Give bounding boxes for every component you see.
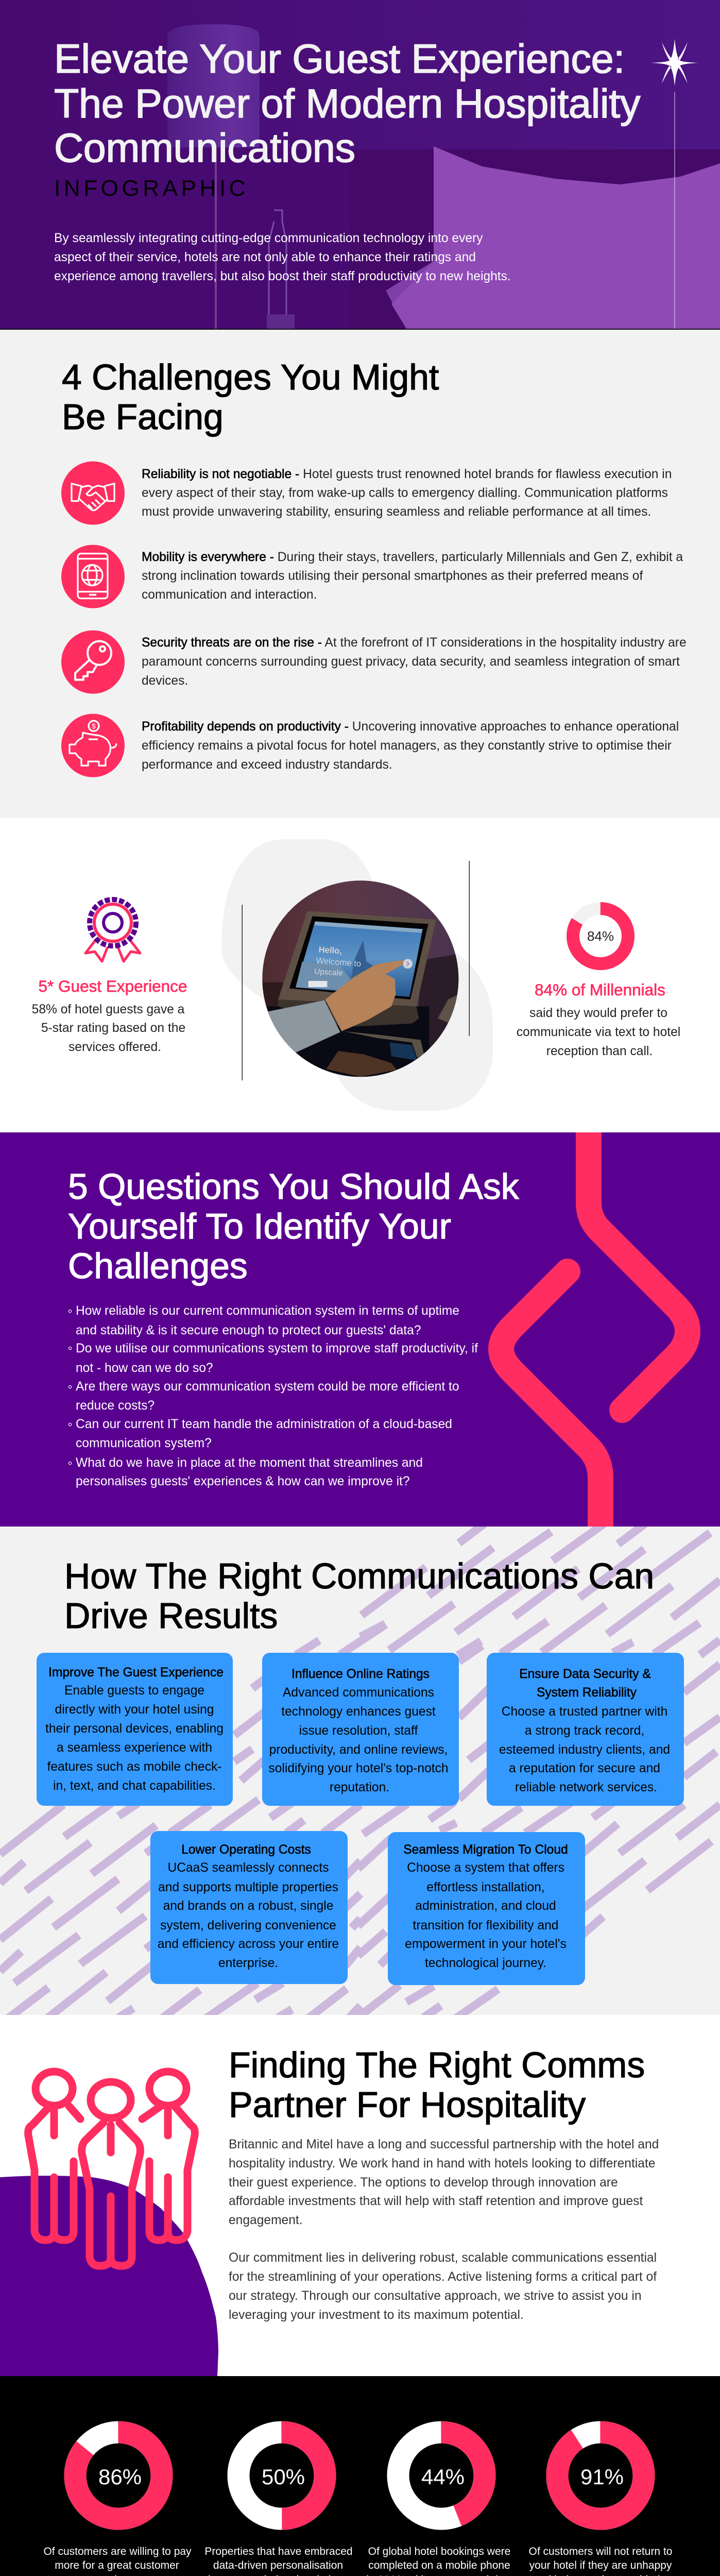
intro text: By seamlessly integrating cutting-edge communication technology into every [54,231,483,245]
card: data security: System Reliability [537,1686,637,1700]
decorative blob top [221,839,379,1010]
stat: 44 percent [366,2432,512,2576]
stat: 50 percent: data-driven personalisation [213,2560,343,2571]
card: seamless migration: Choose a system that offers [407,1861,564,1875]
stat: 86 percent [43,2432,192,2576]
card: seamless migration: technological journey. [425,1956,546,1970]
text: security: Security threats are on the rise - At the forefront of IT considerations in the hospitality industry are [142,636,687,650]
list: questions: Do we utilise our communications system to improve staff productivity, if [76,1342,478,1355]
photo: hand touching tablet: Welcome to [316,956,362,969]
heading: questions: Yourself To Identify Your [68,1206,451,1246]
decorative purple shape [0,2176,218,2376]
list: questions: How reliable is our current communication system in terms of uptime [76,1304,459,1318]
text: 58 percent [32,1003,185,1054]
panel: finding the right partner [0,2015,720,2376]
text: mobility: communication and interaction. [142,588,317,602]
card: data security: a reputation for secure and [509,1761,660,1775]
photo: hand touching tablet: Upscale [314,967,343,978]
text: reliability [142,467,672,519]
heading: results: How The Right Communications Can [64,1556,654,1596]
card: improve the guest experience: in, text, and chat capabilities. [53,1779,216,1793]
heading: comms partner: Partner For Hospitality [229,2084,586,2125]
challenge: mobility [61,545,683,608]
stat: 86 percent: 86% [98,2465,142,2489]
text: mobility [142,550,683,602]
list: questions: communication system? [76,1436,212,1450]
stat: 44 percent: 44% [421,2465,465,2489]
panel: 4 challenges [0,330,720,818]
title: Communications [54,125,355,171]
title: Elevate Your Guest Experience: [54,36,625,81]
card: influence online ratings: Influence Online Ratings [292,1667,430,1681]
list: questions: What do we have in place at the moment that streamlines and [76,1456,423,1470]
stat: 50 percent: 50% [262,2465,305,2489]
decorative blob bottom [337,953,493,1111]
card: seamless migration: transition for flexibility and [413,1919,558,1933]
list: questions: and stability & is it secure enough to protect our guests' data? [76,1324,421,1337]
text: partnership: engagement. [229,2213,303,2227]
heading: challenges: Be Facing [62,397,224,437]
stat: 50 percent [204,2432,353,2576]
list: questions: reduce costs? [76,1399,155,1413]
card: influence online ratings: Advanced communications [283,1686,434,1700]
stat: 44 percent: Of global hotel bookings were [368,2546,510,2557]
list: questions: not - how can we do so? [76,1361,213,1375]
card: data security: Ensure Data Security & [519,1667,651,1681]
icon: sparkle star [651,39,699,86]
text: partnership: their guest experience. The options to develop through innovation are [229,2176,618,2190]
card: seamless migration: effortless installation, [426,1880,545,1894]
heading: 84 percent of millennials: 84% of Millennials [535,980,665,999]
text: 58 percent: 5-star rating based on the [41,1021,185,1035]
hero photo: pillow [386,146,720,329]
card: lower operating costs [150,1831,348,1984]
icon: handshake [61,462,125,524]
heading: comms partner: Finding The Right Comms [229,2045,645,2085]
panel: hero [0,0,720,330]
hero photo: bedside lamp [167,24,260,329]
card: influence online ratings [262,1653,459,1806]
heading: questions: 5 Questions You Should Ask [68,1166,519,1207]
title [54,36,641,171]
list: questions [68,1304,478,1488]
card: improve the guest experience: Enable guests to engage [64,1684,204,1698]
chart: 84 percent donut: 84% [587,928,614,944]
stat: 91 percent: Of customers will not return to [529,2546,672,2557]
icon: piggy bank [61,714,125,777]
card: influence online ratings: issue resolution, staff [299,1724,418,1738]
card: data security: Choose a trusted partner with [502,1705,667,1719]
intro text [54,231,511,283]
text: profitability: efficiency remains a pivotal focus for hotel managers, as they constantly strive to optimise their [142,739,672,753]
list: questions: personalises guests' experiences & how can we improve it? [76,1475,410,1488]
text: 58 percent: 58% of hotel guests gave a [32,1003,185,1016]
stat: 91 percent: 91% [580,2465,624,2489]
heading: questions [68,1166,519,1286]
icon: smartphone globe [61,545,125,608]
heading: results [64,1556,654,1636]
panel: statistics footer [0,2376,720,2576]
heading: comms partner [229,2045,645,2125]
icon: ribbon rosette [85,900,140,961]
text: security: devices. [142,674,188,688]
panel: how communications drive results [0,1524,720,2020]
stat: 86 percent: Of customers are willing to pay [43,2546,192,2557]
card: seamless migration: administration, and cloud [415,1899,556,1913]
text: prefer text: communicate via text to hotel [517,1025,680,1039]
text: mobility: Mobility is everywhere - During their stays, travellers, particularly Millennials and Gen Z, exhibit a [142,550,683,564]
intro text: aspect of their service, hotels are not only able to enhance their ratings and [54,250,476,264]
card: lower operating costs: UCaaS seamlessly connects [167,1861,329,1875]
text: profitability [142,720,679,772]
text: profitability: Profitability depends on productivity - Uncovering innovative approaches to enhance operational [142,720,679,734]
decorative diagonal stripes [0,1524,720,2020]
text: profitability: performance and exceed industry standards. [142,758,392,772]
stat: 91 percent [529,2432,672,2576]
text: prefer text: said they would prefer to [529,1006,667,1020]
heading: results: Drive Results [64,1596,278,1636]
text: commitment [229,2251,657,2322]
card: improve the guest experience: features such as mobile check- [47,1760,222,1774]
list: questions: Can our current IT team handle the administration of a cloud-based [76,1417,452,1431]
text: 58 percent: services offered. [68,1040,161,1054]
card: improve the guest experience: directly with your hotel using [55,1703,214,1717]
intro text: experience among travellers, but also boost their staff productivity to new heights. [54,269,511,283]
text: mobility: strong inclination towards utilising their personal smartphones as their preferred means of [142,569,643,583]
icon: key [61,631,125,693]
stat: millennials [517,909,680,1058]
chart: 84 percent donut [573,909,628,963]
card: data security: esteemed industry clients, and [499,1743,670,1757]
card: lower operating costs: enterprise. [218,1956,278,1970]
card: data security: reliable network services. [515,1781,657,1794]
text: commitment: leveraging your investment to its maximum potential. [229,2308,524,2322]
text: prefer text: reception than call. [546,1044,653,1058]
stat: guest experience [32,900,187,1054]
icon: piggy bank: $ [92,722,96,730]
text: partnership: hospitality industry. We work hand in hand with hotels looking to differentiate [229,2157,655,2171]
card: lower operating costs: Lower Operating Costs [181,1843,311,1857]
stat: 91 percent: your hotel if they are unhappy [529,2560,672,2571]
hero photo: glass bottle [267,210,295,329]
text: security [142,636,687,688]
card: seamless migration: empowerment in your hotel's [405,1937,567,1951]
text: reliability: must provide unwavering stability, ensuring seamless and reliable performance at all times. [142,505,651,519]
card: influence online ratings: reputation. [330,1781,389,1794]
challenge: security [61,631,687,693]
challenge: reliability [61,462,672,524]
panel: 5 questions [0,1108,720,1546]
card: seamless migration [388,1832,585,1985]
card: improve the guest experience [37,1653,233,1806]
heading: challenges [62,357,439,437]
photo: hand touching tablet: Hello, [318,944,342,956]
stat: 86 percent: more for a great customer [55,2560,179,2571]
text: partnership: affordable investments that will help with staff retention and improve guest [229,2194,643,2208]
subtitle: infographic: INFOGRAPHIC [54,176,249,201]
card: improve the guest experience: Improve The Guest Experience [48,1666,224,1680]
card: improve the guest experience: a seamless experience with [57,1741,212,1755]
challenge: profitability [61,714,679,777]
text: commitment: our strategy. Through our consultative approach, we strive to assist you in [229,2289,642,2303]
text: prefer text [517,1006,680,1058]
card: lower operating costs: and efficiency across your entire [158,1937,339,1951]
text: partnership [229,2138,659,2227]
title: The Power of Modern Hospitality [54,80,641,126]
text: reliability: Reliability is not negotiable - Hotel guests trust renowned hotel brands for flawless execution in [142,467,672,481]
text: commitment: Our commitment lies in delivering robust, scalable communications essential [229,2251,657,2265]
card: seamless migration: Seamless Migration To Cloud [403,1843,568,1857]
text: commitment: for the streamlining of your operations. Active listening forms a critical part of [229,2270,657,2284]
card: influence online ratings: technology enhances guest [281,1705,436,1719]
card: improve the guest experience: their personal devices, enabling [45,1722,224,1736]
decorative pink lines [501,1108,688,1546]
heading: challenges: 4 Challenges You Might [62,357,439,397]
panel: statistics and photo [32,839,680,1111]
text: reliability: every aspect of their stay, from wake-up calls to emergency dialling. Communication platforms [142,486,668,500]
icon: three people [28,2072,195,2266]
text: partnership: Britannic and Mitel have a long and successful partnership with the hotel and [229,2138,659,2151]
photo: hand touching tablet [258,876,464,1082]
heading: questions: Challenges [68,1246,248,1286]
card: lower operating costs: and brands on a robust, single [163,1899,333,1913]
card: lower operating costs: system, delivering convenience [160,1919,336,1933]
text: security: paramount concerns surrounding guest privacy, data security, and seamless integration of smart [142,655,680,669]
heading: 5 star guest experience: 5* Guest Experience [39,977,187,995]
stat: 44 percent: completed on a mobile phone [368,2560,510,2571]
card: data security: a strong track record, [525,1724,644,1738]
list: questions: Are there ways our communication system could be more efficient to [76,1380,459,1394]
stat: 50 percent: Properties that have embraced [204,2546,353,2557]
card: influence online ratings: solidifying your hotel's top-notch [268,1761,449,1775]
card: data security [487,1653,684,1806]
card: influence online ratings: productivity, and online reviews, [269,1743,448,1757]
card: lower operating costs: and supports multiple properties [158,1880,338,1894]
